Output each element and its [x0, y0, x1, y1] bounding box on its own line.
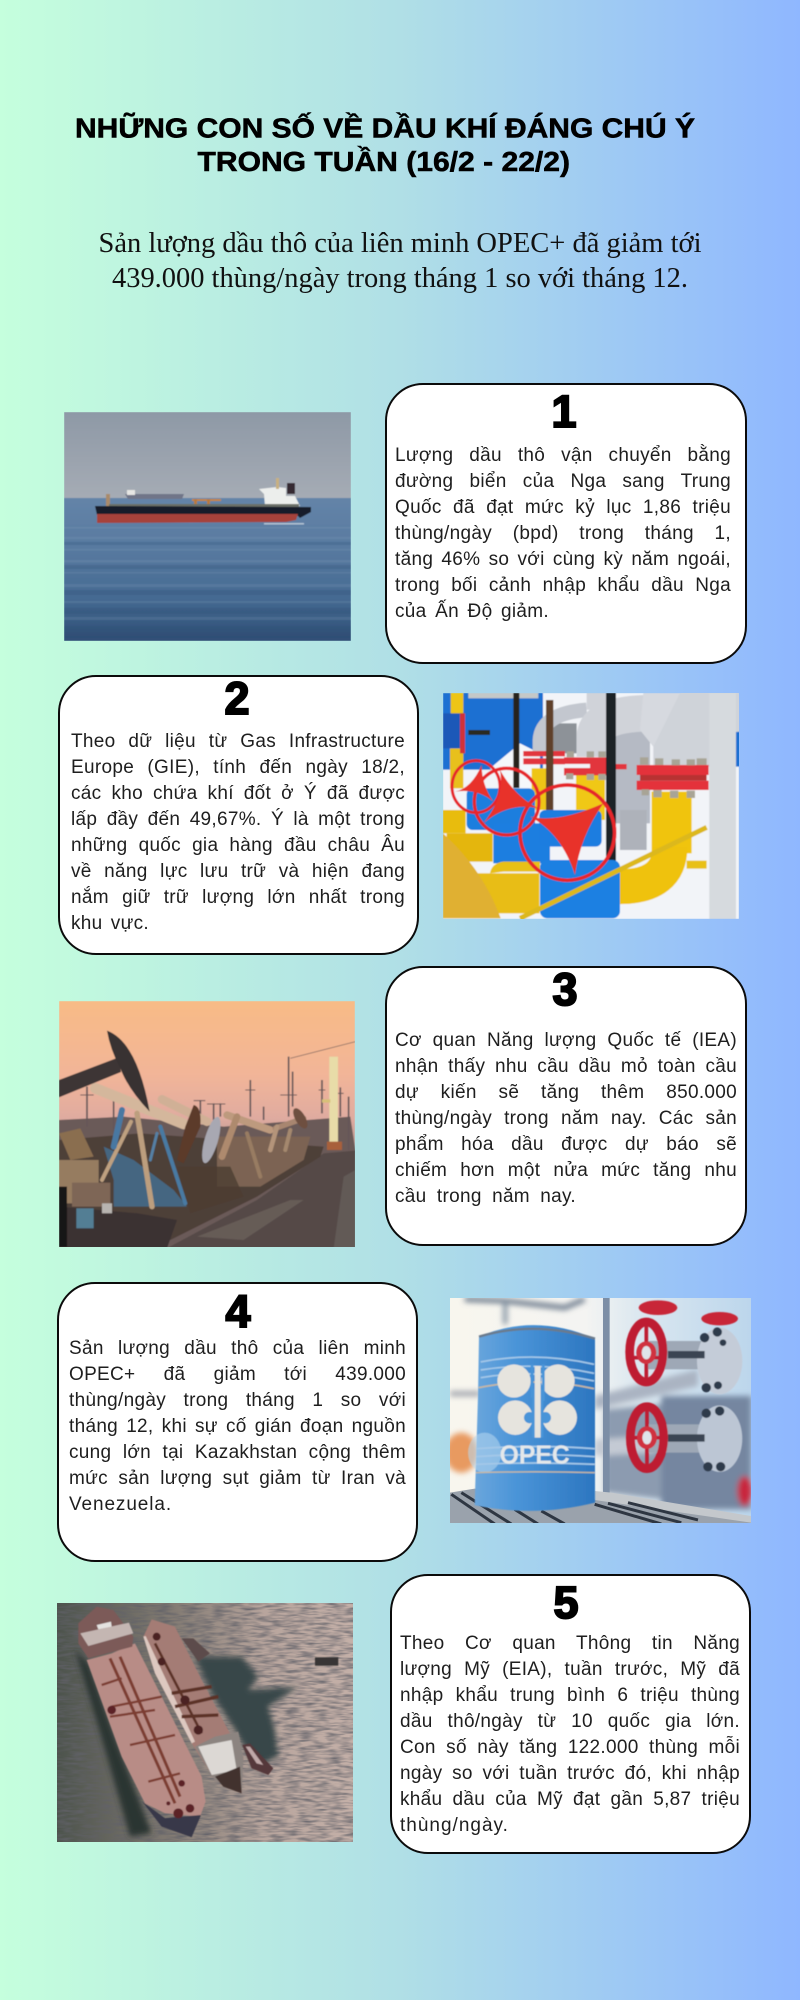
text 3: chiếm hơn một nửa mức tăng nhu	[395, 1160, 737, 1181]
image: oil pump jacks at dusk	[59, 1001, 355, 1247]
text 2: Europe (GIE), tính đến ngày 18/2,	[71, 757, 405, 778]
title: TRONG TUẦN (16/2 - 22/2)	[198, 146, 570, 177]
number 1: 1	[551, 386, 577, 437]
image: OPEC barrel and red valves	[450, 1298, 751, 1523]
card 4	[57, 1282, 418, 1562]
number 5: 5	[553, 1577, 579, 1628]
text 1: trong bối cảnh nhập khẩu dầu Nga	[395, 575, 731, 596]
title: NHỮNG CON SỐ VỀ DẦU KHÍ ĐÁNG CHÚ Ý	[75, 112, 695, 144]
text 2: lấp đầy đến 49,67%. Ý là một trong	[71, 809, 405, 830]
text 5: dầu thô/ngày từ 10 quốc gia lớn.	[400, 1711, 740, 1732]
text 5: lượng Mỹ (EIA), tuần trước, Mỹ đã	[400, 1659, 740, 1680]
text 2: Theo dữ liệu từ Gas Infrastructure	[71, 731, 405, 752]
text 2: những quốc gia hàng đầu châu Âu	[71, 835, 405, 856]
text 5: thùng/ngày.	[400, 1815, 509, 1836]
text 4	[69, 1338, 406, 1515]
text 2	[71, 731, 405, 934]
text 4: thùng/ngày trong tháng 1 so với	[69, 1390, 406, 1411]
text 2: về năng lực lưu trữ và hiện đang	[71, 861, 405, 882]
image: tanker at sea	[64, 412, 351, 641]
title	[75, 112, 695, 177]
text 4: OPEC+ đã giảm tới 439.000	[69, 1364, 406, 1385]
number 4: 4	[225, 1286, 251, 1337]
text 2: các kho chứa khí đốt ở Ý đã được	[71, 783, 405, 804]
subtitle: Sản lượng dầu thô của liên minh OPEC+ đã giảm tới	[98, 227, 702, 259]
text 3: dự kiến sẽ tăng thêm 850.000	[395, 1082, 737, 1103]
text 1: Lượng dầu thô vận chuyển bằng	[395, 445, 731, 466]
number 3: 3	[552, 964, 578, 1015]
text 2: khu vực.	[71, 913, 149, 934]
text 3	[395, 1030, 737, 1207]
text 3: phẩm hóa dầu được dự báo sẽ	[395, 1134, 737, 1155]
text 4: tháng 12, khi sự cố gián đoạn nguồn	[69, 1416, 406, 1437]
subtitle: 439.000 thùng/ngày trong tháng 1 so với tháng 12.	[112, 262, 688, 294]
text 5: khẩu dầu của Mỹ đạt gần 5,87 triệu	[400, 1789, 740, 1810]
image: gas pipes and valves	[443, 693, 739, 919]
card 3	[385, 966, 747, 1246]
image: aerial tankers on water	[57, 1603, 353, 1842]
number 2: 2	[224, 673, 250, 724]
header: title and subtitle	[75, 112, 702, 294]
card 2	[58, 675, 419, 955]
text 1: tăng 46% so với cùng kỳ năm ngoái,	[395, 549, 731, 570]
text 5: nhập khẩu trung bình 6 triệu thùng	[400, 1685, 740, 1706]
text 3: nhận thấy nhu cầu dầu mỏ toàn cầu	[395, 1056, 737, 1077]
text 5: Theo Cơ quan Thông tin Năng	[400, 1633, 740, 1654]
text 3: Cơ quan Năng lượng Quốc tế (IEA)	[395, 1030, 737, 1051]
text 4: Venezuela.	[69, 1494, 172, 1515]
text 1: đường biển của Nga sang Trung	[395, 471, 731, 492]
text 5: ngày so với tuần trước đó, khi nhập	[400, 1763, 740, 1784]
text 5: Con số này tăng 122.000 thùng mỗi	[400, 1737, 740, 1758]
text 1: của Ấn Độ giảm.	[395, 601, 549, 622]
text 4: cung lớn tại Kazakhstan cộng thêm	[69, 1442, 406, 1463]
text 1: thùng/ngày (bpd) trong tháng 1,	[395, 523, 731, 544]
text 4: Sản lượng dầu thô của liên minh	[69, 1338, 406, 1359]
text 3: cầu trong năm nay.	[395, 1186, 576, 1207]
text 3: thùng/ngày trong năm nay. Các sản	[395, 1108, 737, 1129]
text 1	[395, 444, 731, 622]
subtitle	[98, 227, 702, 294]
card 5	[390, 1574, 751, 1854]
text 5	[400, 1633, 740, 1836]
text 2: nắm giữ trữ lượng lớn nhất trong	[71, 887, 405, 908]
image: OPEC barrel and red valves: OPEC	[500, 1439, 570, 1469]
card 1	[385, 383, 747, 664]
text 1: Quốc đã đạt mức kỷ lục 1,86 triệu	[395, 497, 731, 518]
text 4: mức sản lượng sụt giảm từ Iran và	[69, 1468, 406, 1489]
